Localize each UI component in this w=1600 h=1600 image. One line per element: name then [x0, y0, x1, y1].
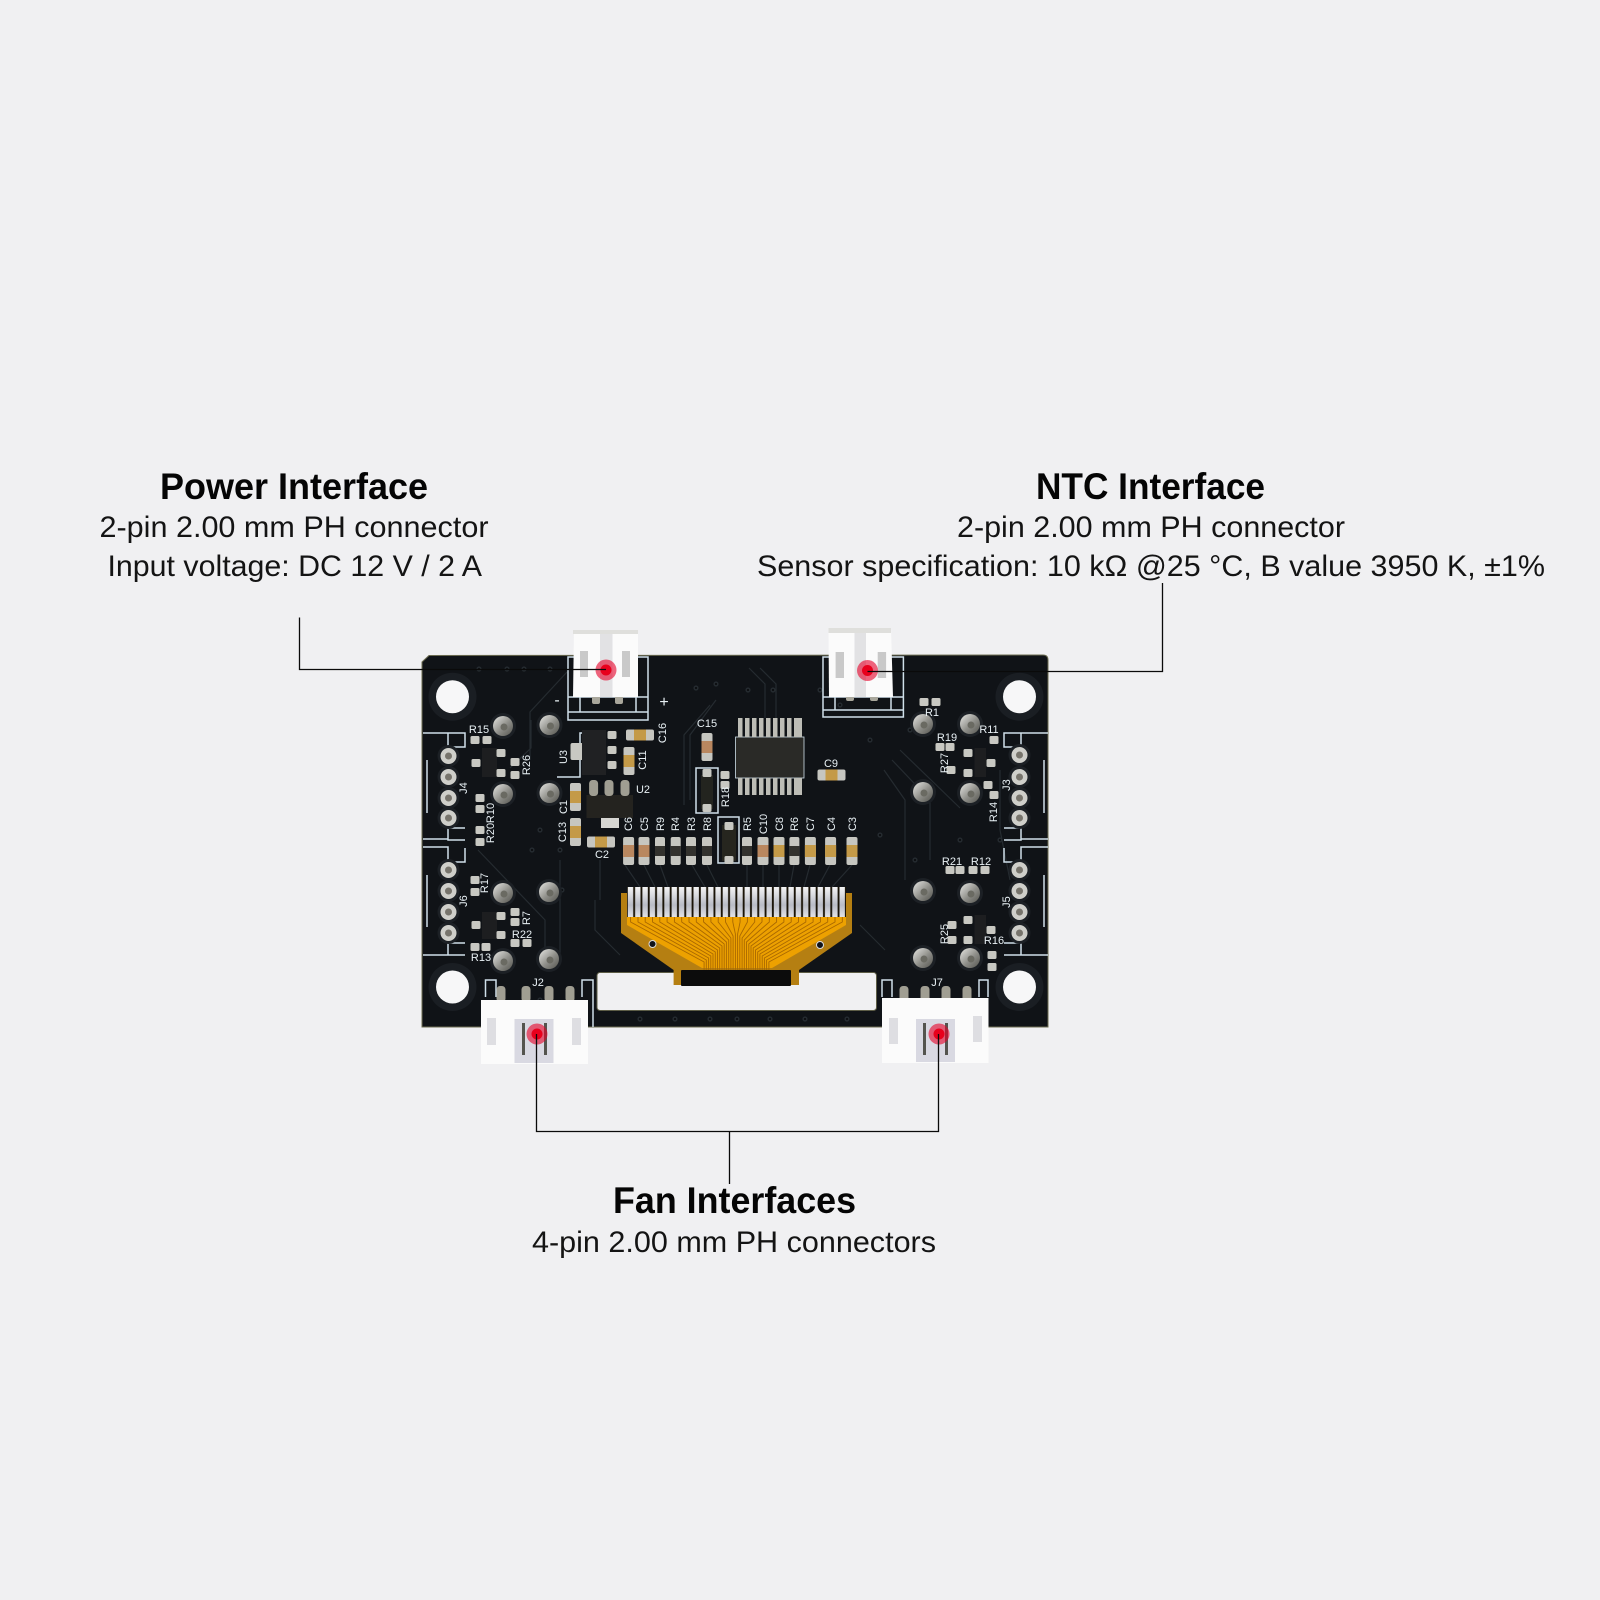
- silkscreen outlines: [423, 733, 1048, 1027]
- silkscreen component labels: R22: [512, 929, 532, 941]
- silkscreen component labels: C6: [623, 817, 635, 831]
- callout: fan interfaces: [532, 1180, 936, 1259]
- silkscreen component labels: C13: [557, 822, 569, 842]
- silkscreen component labels: J5: [1001, 896, 1013, 908]
- ribbon contact pads: [627, 887, 846, 917]
- board body: [422, 655, 1048, 1027]
- callout: NTC interface: [757, 466, 1545, 583]
- silkscreen component labels: R15: [469, 724, 489, 736]
- marker dot: fan connector right: [928, 1024, 950, 1044]
- silkscreen component labels: J6: [458, 895, 470, 907]
- silkscreen component labels: C15: [697, 718, 717, 730]
- callout: NTC interface: Sensor specification: 10 kΩ @25 °C, B value 3950 K, ±1%: [757, 550, 1545, 583]
- silkscreen component labels: R10: [485, 803, 497, 823]
- silkscreen component labels: R16: [984, 935, 1004, 947]
- silkscreen component labels: R3: [686, 817, 698, 831]
- silkscreen component labels: C9: [824, 758, 838, 770]
- silkscreen component labels: R27: [939, 753, 951, 773]
- silkscreen component labels: R26: [521, 755, 533, 775]
- board vias: [476, 666, 1003, 1022]
- marker dot: NTC connector: [857, 660, 878, 681]
- silkscreen component labels: R17: [479, 873, 491, 893]
- silkscreen component labels: C4: [826, 817, 838, 831]
- leader line: power: [300, 618, 606, 670]
- callout: NTC interface: NTC Interface: [1036, 466, 1265, 507]
- silkscreen component labels: U2: [636, 784, 650, 796]
- fan connector J7: [882, 986, 988, 1063]
- silkscreen component labels: R8: [702, 817, 714, 831]
- board traces: [478, 668, 1010, 960]
- mounting holes: [428, 673, 1044, 1011]
- silkscreen component labels: R12: [971, 856, 991, 868]
- power connector: [568, 630, 648, 720]
- silkscreen component labels: R5: [742, 817, 754, 831]
- silkscreen component labels: R11: [979, 724, 999, 736]
- silkscreen component labels: J4: [458, 782, 470, 794]
- silkscreen component labels: R9: [655, 817, 667, 831]
- marker dot: power connector: [596, 660, 616, 680]
- large through-hole pads: [490, 711, 983, 974]
- silkscreen component labels: J2: [532, 977, 544, 989]
- silkscreen component labels: -: [554, 692, 560, 709]
- leader line: fans: [536, 1034, 938, 1184]
- silkscreen component labels: R21: [942, 856, 962, 868]
- marker dot: fan connector left: [526, 1024, 548, 1044]
- silkscreen component labels: J7: [931, 977, 943, 989]
- silkscreen component labels: R25: [939, 924, 951, 944]
- NTC connector: [823, 628, 903, 717]
- callout: power interface: Input voltage: DC 12 V / 2 A: [108, 550, 482, 583]
- callout: power interface: Power Interface: [160, 466, 428, 507]
- regulators U3 and U2: [570, 730, 633, 828]
- silkscreen component labels: R20: [485, 823, 497, 843]
- flexible display ribbon cable: [621, 887, 852, 986]
- silkscreen component labels: C2: [595, 849, 609, 861]
- circuit board photo: [422, 628, 1048, 1064]
- callout: fan interfaces: Fan Interfaces: [613, 1180, 856, 1221]
- side header pads: [438, 744, 1030, 944]
- silkscreen component labels: C8: [774, 817, 786, 831]
- callout: power interface: [100, 466, 489, 583]
- silkscreen component labels: R13: [471, 952, 491, 964]
- callout: NTC interface: 2-pin 2.00 mm PH connector: [957, 511, 1345, 544]
- fan connector J2: [481, 986, 588, 1064]
- callout: fan interfaces: 4-pin 2.00 mm PH connectors: [532, 1226, 936, 1259]
- silkscreen component labels: U3: [558, 750, 570, 764]
- silkscreen component labels: J3: [1001, 779, 1013, 791]
- silkscreen component labels: C1: [558, 800, 570, 814]
- silkscreen component labels: C10: [758, 814, 770, 834]
- silkscreen component labels: C11: [637, 750, 649, 770]
- silkscreen component labels: +: [659, 694, 669, 711]
- silkscreen component labels: R14: [988, 802, 1000, 822]
- bottom window cut-out: [597, 972, 876, 1010]
- silkscreen component labels: R4: [670, 817, 682, 831]
- transistors and small passives: [470, 698, 998, 971]
- silkscreen component labels: C5: [639, 817, 651, 831]
- silkscreen component labels: R18: [720, 787, 732, 807]
- silkscreen component labels: R7: [521, 911, 533, 925]
- silkscreen component labels: C7: [805, 817, 817, 831]
- silkscreen component labels: [458, 692, 1013, 989]
- callout: power interface: 2-pin 2.00 mm PH connector: [100, 511, 489, 544]
- surface-mount capacitors and resistors: [570, 730, 858, 865]
- silkscreen component labels: R19: [937, 732, 957, 744]
- main controller chip: [736, 718, 804, 795]
- leader line: NTC: [868, 583, 1162, 672]
- silkscreen component labels: R1: [925, 707, 939, 719]
- ribbon stiffener bar: [681, 970, 791, 986]
- silkscreen component labels: R6: [789, 817, 801, 831]
- silkscreen component labels: C3: [847, 817, 859, 831]
- silkscreen component labels: C16: [657, 723, 669, 743]
